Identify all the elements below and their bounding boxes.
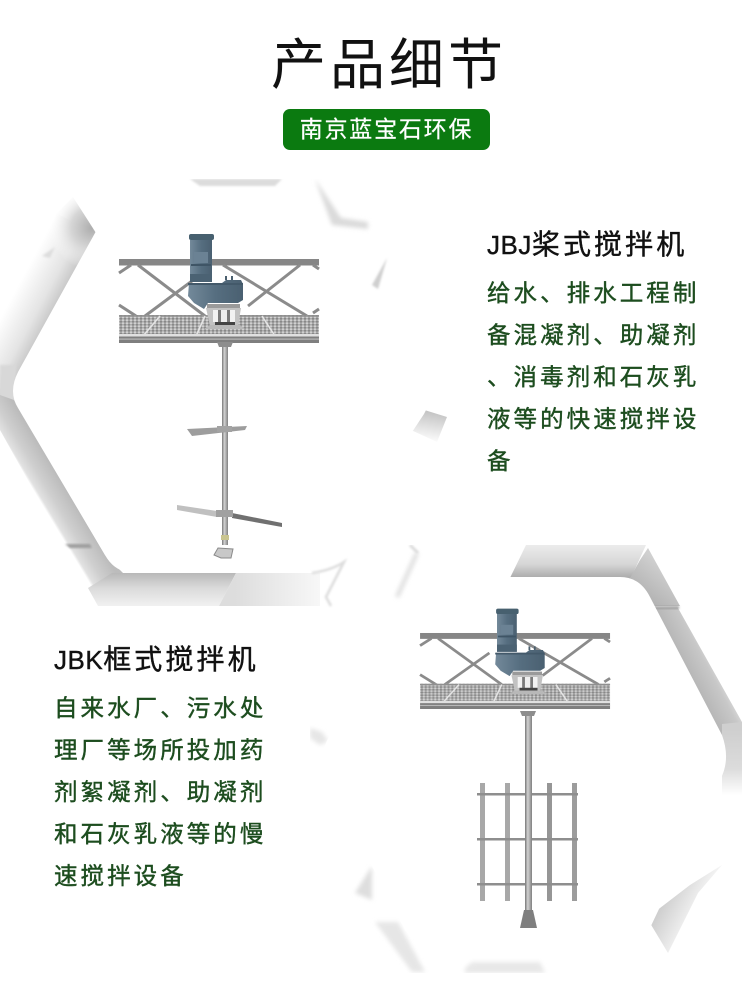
text block: JBJ description: 备混凝剂、助凝剂 <box>487 322 699 348</box>
heading: JBK frame mixer: JBK框式搅拌机 <box>54 644 259 675</box>
image: JBJ paddle mixer <box>119 234 319 558</box>
image: JBK frame mixer <box>420 609 610 928</box>
text block: JBJ description: 给水、排水工程制 <box>487 280 699 306</box>
text block: JBK description: 速搅拌设备 <box>54 863 187 889</box>
text block: JBJ description: 、消毒剂和石灰乳 <box>487 364 699 390</box>
panel: white hexagon top <box>13 207 428 573</box>
text block: JBK description: 理厂等场所投加药 <box>54 737 266 763</box>
text block: JBK description: 剂絮凝剂、助凝剂 <box>54 779 266 805</box>
title: 产品细节 <box>271 34 507 96</box>
badge: company name <box>283 109 490 150</box>
text block: JBJ description <box>487 280 699 474</box>
panel: hexagon background top <box>0 179 460 606</box>
hexagon backgrounds and product images <box>0 179 742 973</box>
panel: hexagon background bottom <box>310 545 742 973</box>
heading: JBJ paddle mixer: JBJ桨式搅拌机 <box>487 229 687 260</box>
text block: JBK description: 和石灰乳液等的慢 <box>54 821 266 847</box>
badge: company name: 南京蓝宝石环保 <box>300 116 473 142</box>
text block: JBK description <box>54 695 266 889</box>
text block: JBK description: 自来水厂、污水处 <box>54 695 266 721</box>
text block: JBJ description: 备 <box>487 448 514 474</box>
text block: JBJ description: 液等的快速搅拌设 <box>487 406 699 432</box>
panel: white hexagon bottom <box>322 577 726 945</box>
